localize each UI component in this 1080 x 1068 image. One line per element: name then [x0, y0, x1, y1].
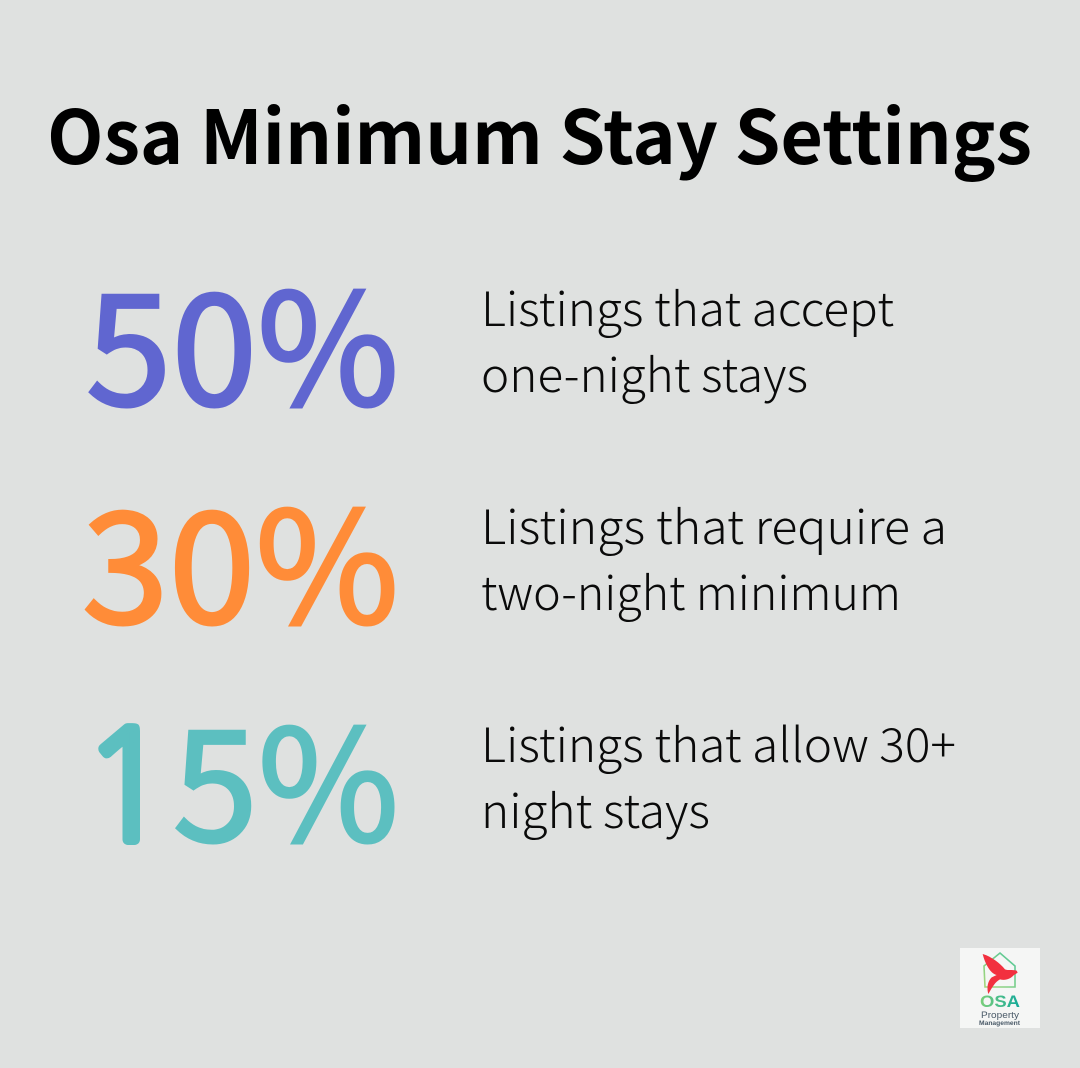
description: two-night minimum: two-night minimum	[481, 555, 901, 624]
logo text: OSA: OSA	[980, 992, 1020, 1011]
icon: red bird	[983, 954, 1018, 994]
stat value: 15%: 15%	[80, 663, 399, 886]
description: one-night stays: one-night stays	[481, 337, 808, 406]
description: one-night stays: Listings that accept	[481, 271, 894, 340]
title: Osa Minimum Stay Settings	[47, 79, 1032, 186]
description: 30+ night stays: Listings that allow 30+	[481, 707, 956, 776]
logo: Osa Property Management	[960, 948, 1040, 1028]
stat row: 30%	[82, 445, 947, 668]
logo text: Management: Management	[979, 1021, 1020, 1027]
stat value: 50%: 50%	[86, 227, 399, 450]
logo text: Property: Property	[981, 1010, 1019, 1021]
description: one-night stays	[481, 271, 894, 406]
description: 30+ night stays	[481, 707, 956, 842]
stat row: 50%	[86, 227, 894, 450]
stat row: 15%	[80, 663, 956, 886]
description: two-night minimum	[481, 489, 947, 624]
icon: house outline	[984, 953, 1015, 987]
description: 30+ night stays: night stays	[481, 773, 710, 842]
description: two-night minimum: Listings that require a	[481, 489, 947, 558]
stat value: 30%: 30%	[82, 445, 399, 668]
